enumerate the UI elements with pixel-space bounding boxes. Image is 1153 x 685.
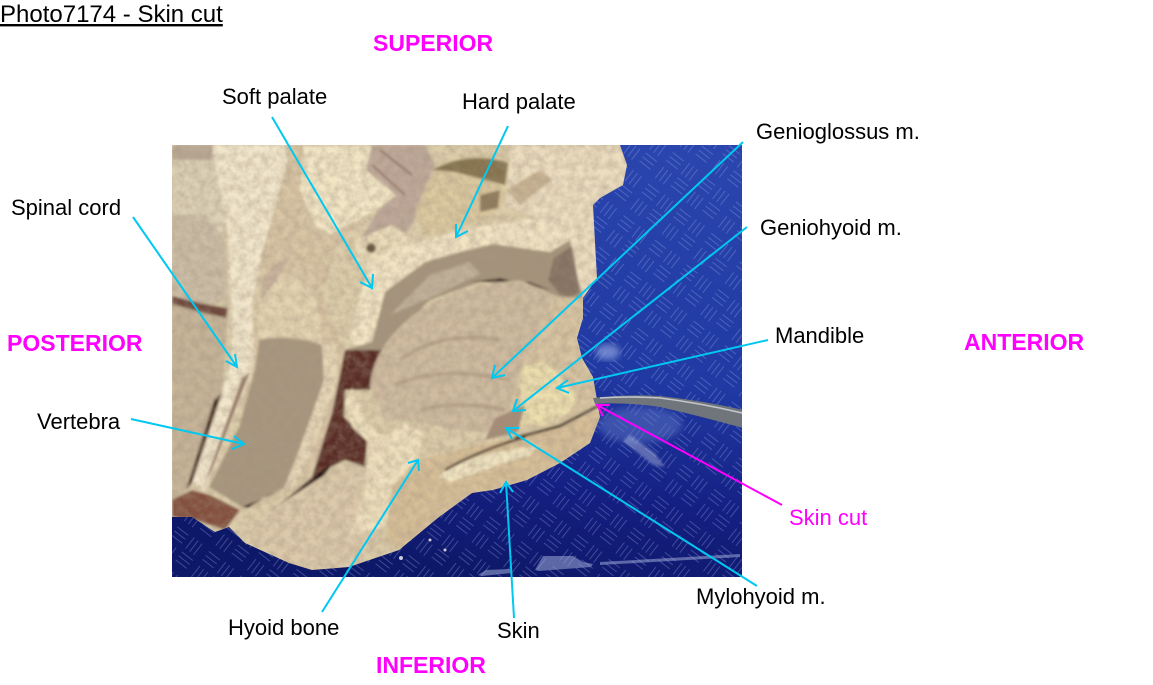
anterior upper tissue xyxy=(505,146,627,300)
specimen tissue xyxy=(165,140,642,580)
nasal cavity xyxy=(415,172,505,236)
label: soft palate with arrow xyxy=(222,84,373,288)
label: skin with arrow: Skin xyxy=(497,618,540,643)
direction label: superior: SUPERIOR xyxy=(373,30,494,56)
vertebral body xyxy=(209,338,324,507)
label: hard palate with arrow: Hard palate xyxy=(462,89,576,114)
label: skin cut with magenta arrow: Skin cut xyxy=(789,505,867,530)
hard palate xyxy=(349,218,570,346)
direction label: posterior: POSTERIOR xyxy=(7,330,143,356)
label: mandible with arrow: Mandible xyxy=(775,323,864,348)
label: soft palate with arrow: Soft palate xyxy=(222,84,327,109)
upper left vertebrae xyxy=(172,160,224,231)
label: hard palate with arrow xyxy=(456,89,576,237)
spinal cord xyxy=(192,145,287,490)
direction label: anterior: ANTERIOR xyxy=(964,329,1084,355)
soft palate region and uvula surroundings xyxy=(300,146,404,235)
label: mylohyoid muscle with arrow: Mylohyoid m. xyxy=(696,584,826,609)
label: hyoid bone with arrow xyxy=(228,460,419,640)
title: Photo7174 - Skin cut xyxy=(0,1,223,28)
label: genioglossus muscle with arrow: Genioglossus m. xyxy=(756,119,920,144)
label: vertebra with arrow: Vertebra xyxy=(37,409,121,434)
label: skin with arrow xyxy=(497,482,540,643)
direction label: inferior: INFERIOR xyxy=(376,652,486,678)
floor of mouth and skin xyxy=(385,410,600,550)
forceps xyxy=(593,395,743,428)
photo: dissected head and neck specimen on blue mat xyxy=(165,140,743,580)
label: spinal cord with arrow: Spinal cord xyxy=(11,195,121,220)
epiglottis and hyoid xyxy=(345,388,422,537)
label: mylohyoid muscle with arrow xyxy=(506,428,826,609)
blue mat background xyxy=(172,145,742,577)
label: vertebra with arrow xyxy=(37,409,244,449)
label: mandible with arrow xyxy=(557,323,864,393)
label: geniohyoid muscle with arrow: Geniohyoid m. xyxy=(760,215,902,240)
floor below gap xyxy=(254,474,324,523)
label: hyoid bone with arrow: Hyoid bone xyxy=(228,615,339,640)
label: spinal cord with arrow xyxy=(11,195,237,367)
tissue below palate xyxy=(345,240,583,360)
central column xyxy=(256,158,358,502)
tongue xyxy=(370,280,555,432)
label: genioglossus muscle with arrow xyxy=(492,119,920,378)
pharyngeal gap xyxy=(288,348,382,498)
mandible xyxy=(512,295,576,424)
label: skin cut with magenta arrow xyxy=(597,405,867,530)
label: geniohyoid muscle with arrow xyxy=(513,215,902,411)
